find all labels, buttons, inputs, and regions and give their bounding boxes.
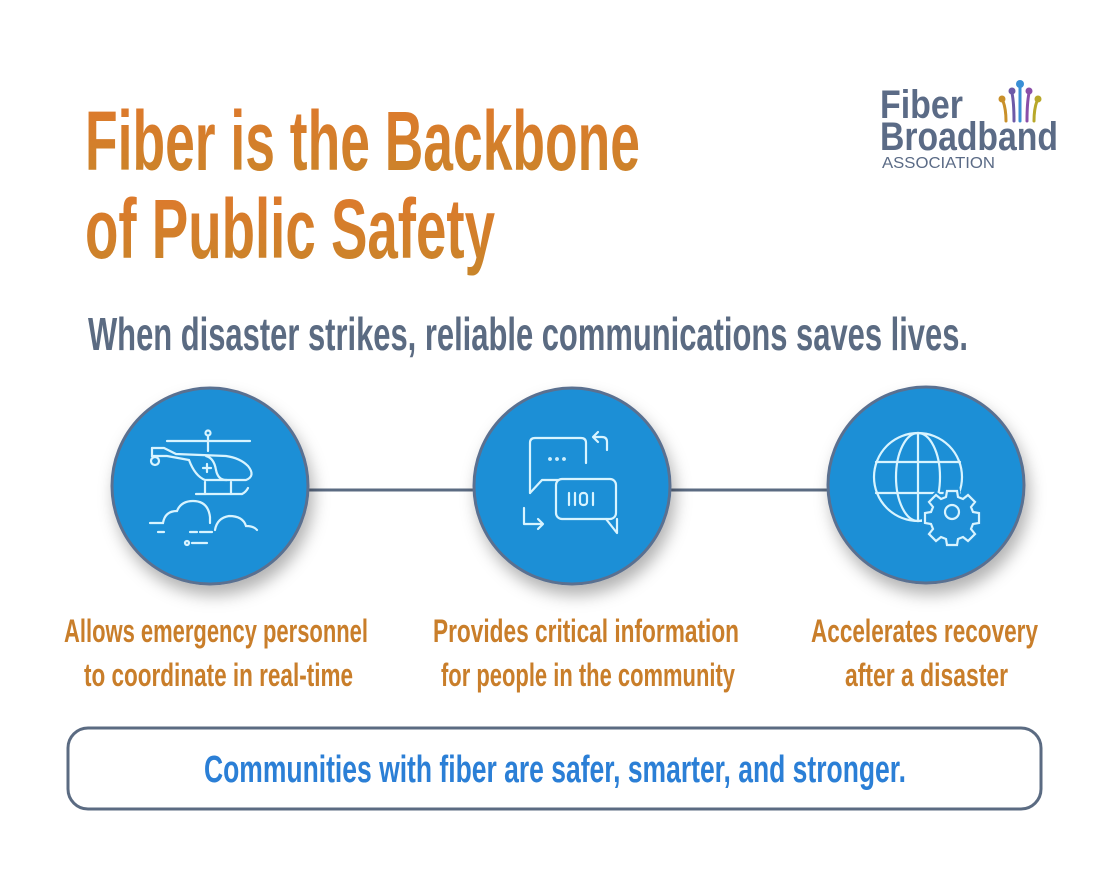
circle: helicopter (112, 388, 308, 584)
caption 1 (64, 613, 368, 693)
logo: Broadband (880, 115, 1058, 159)
caption 1: Allows emergency personnel (64, 613, 368, 649)
title (85, 94, 640, 276)
title: of Public Safety (85, 182, 495, 276)
icon: fiber strands (998, 80, 1042, 121)
caption 3: after a disaster (845, 657, 1008, 693)
circle: chat (474, 388, 670, 584)
logo (880, 80, 1058, 172)
connector line (300, 488, 840, 492)
caption 2: for people in the community (441, 657, 735, 693)
captions (64, 613, 1038, 693)
circle: globe gear (828, 387, 1024, 583)
logo: ASSOCIATION (882, 155, 995, 172)
caption 3 (811, 613, 1038, 693)
caption 2: Provides critical information (433, 613, 739, 649)
callout box (68, 728, 1041, 809)
title: Fiber is the Backbone (85, 94, 640, 188)
caption 1: to coordinate in real-time (84, 657, 353, 693)
logo: Fiber (880, 83, 963, 127)
caption 2 (433, 613, 739, 693)
